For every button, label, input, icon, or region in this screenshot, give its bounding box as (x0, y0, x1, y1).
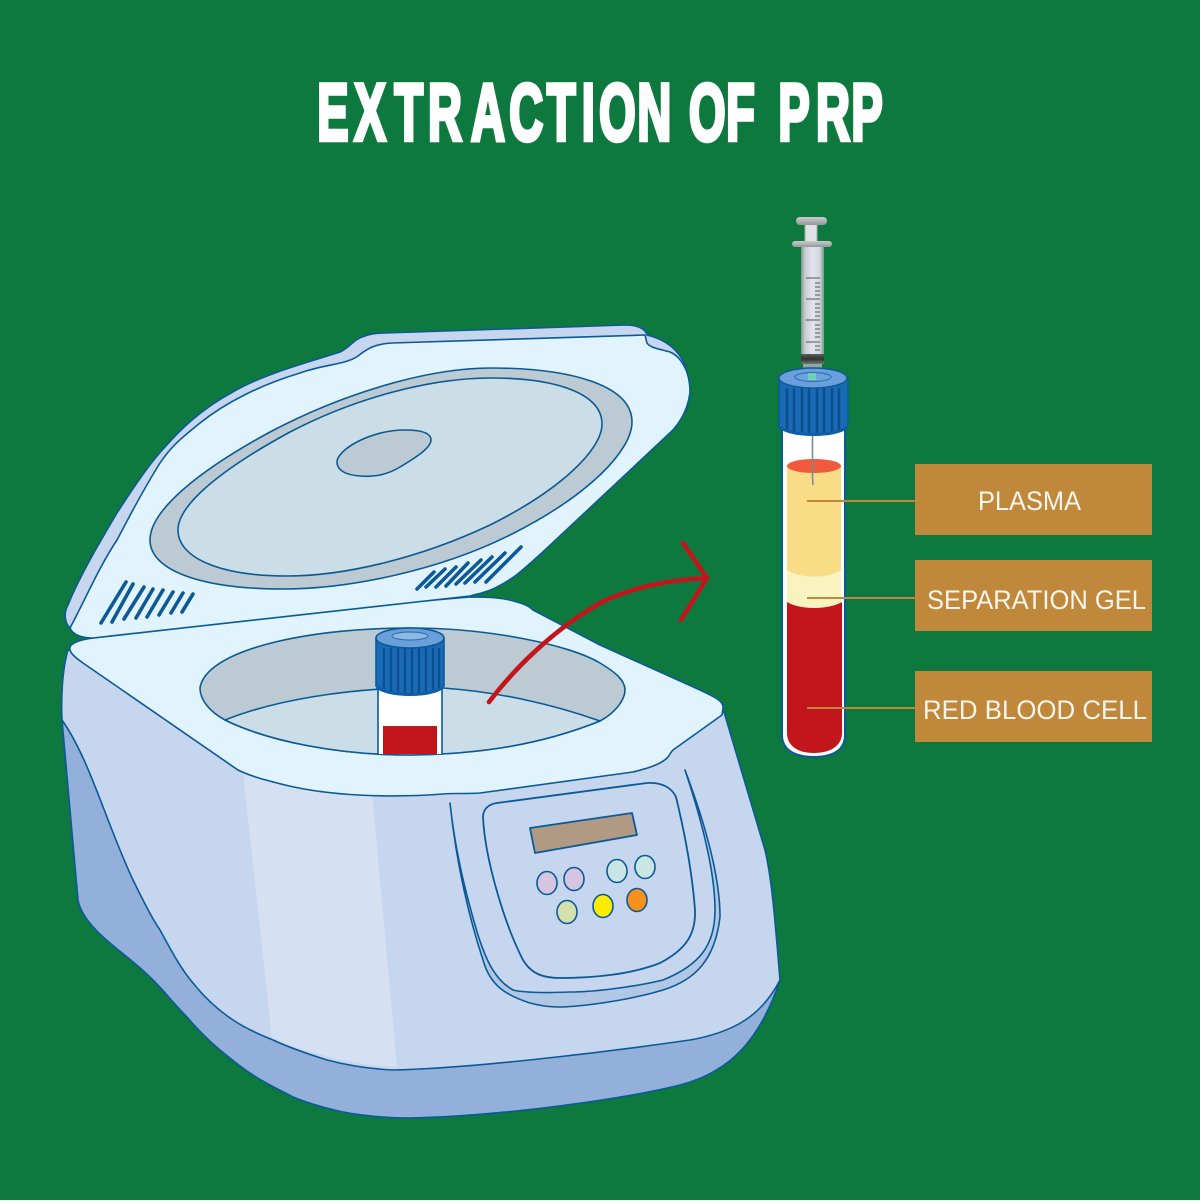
plasma layer (787, 466, 841, 577)
aqua button (635, 856, 655, 878)
small tube in well (376, 628, 444, 754)
purple button (564, 868, 584, 890)
yellow button (593, 894, 613, 918)
platelet-rich top layer (787, 459, 841, 473)
aqua button (607, 860, 627, 882)
lid inner face (70, 335, 690, 638)
label: plasma (807, 464, 1152, 535)
left vents (101, 582, 193, 623)
lid back edge (65, 325, 686, 628)
tube cap (779, 368, 848, 435)
body light strip (243, 772, 397, 1067)
right vents (417, 547, 521, 589)
green button (557, 900, 577, 924)
lid inner disc (178, 378, 602, 576)
centrifuge machine (62, 325, 780, 1118)
rubber tip (801, 354, 824, 364)
barrel (801, 245, 824, 357)
syringe (792, 217, 832, 369)
base top surface (70, 597, 723, 796)
control panel (483, 783, 695, 978)
tube glass (782, 425, 845, 757)
control panel swoosh (450, 770, 720, 1007)
orange button (627, 888, 647, 912)
lid outer ring (150, 368, 632, 589)
label: separation gel (807, 560, 1152, 631)
label: red blood cell (807, 671, 1152, 742)
panel outline (483, 783, 695, 978)
small tube cap (376, 628, 444, 695)
plunger disc (796, 217, 827, 225)
plunger rod (805, 224, 817, 244)
label: separation gel: SEPARATION GEL (927, 585, 1146, 615)
arrow: red curved arrow (489, 543, 707, 702)
tube body (378, 680, 442, 754)
well floor (225, 688, 600, 755)
syringe nozzle (803, 364, 822, 369)
body lower shadow band (62, 720, 780, 1118)
purple button (537, 872, 557, 894)
centrifuge body (62, 650, 780, 1118)
title: EXTRACTION OF PRP (317, 68, 883, 158)
label: plasma: PLASMA (978, 486, 1081, 516)
flange (792, 241, 832, 247)
red blood in tube (383, 726, 437, 754)
needle (812, 368, 814, 485)
red blood cell layer (787, 602, 842, 753)
lid knob (337, 430, 431, 476)
graduation ticks (806, 278, 820, 350)
large blood tube (779, 368, 848, 757)
label: red blood cell: RED BLOOD CELL (923, 695, 1147, 725)
separation gel layer (787, 570, 841, 608)
centrifuge well (200, 628, 625, 755)
display screen (530, 813, 637, 853)
